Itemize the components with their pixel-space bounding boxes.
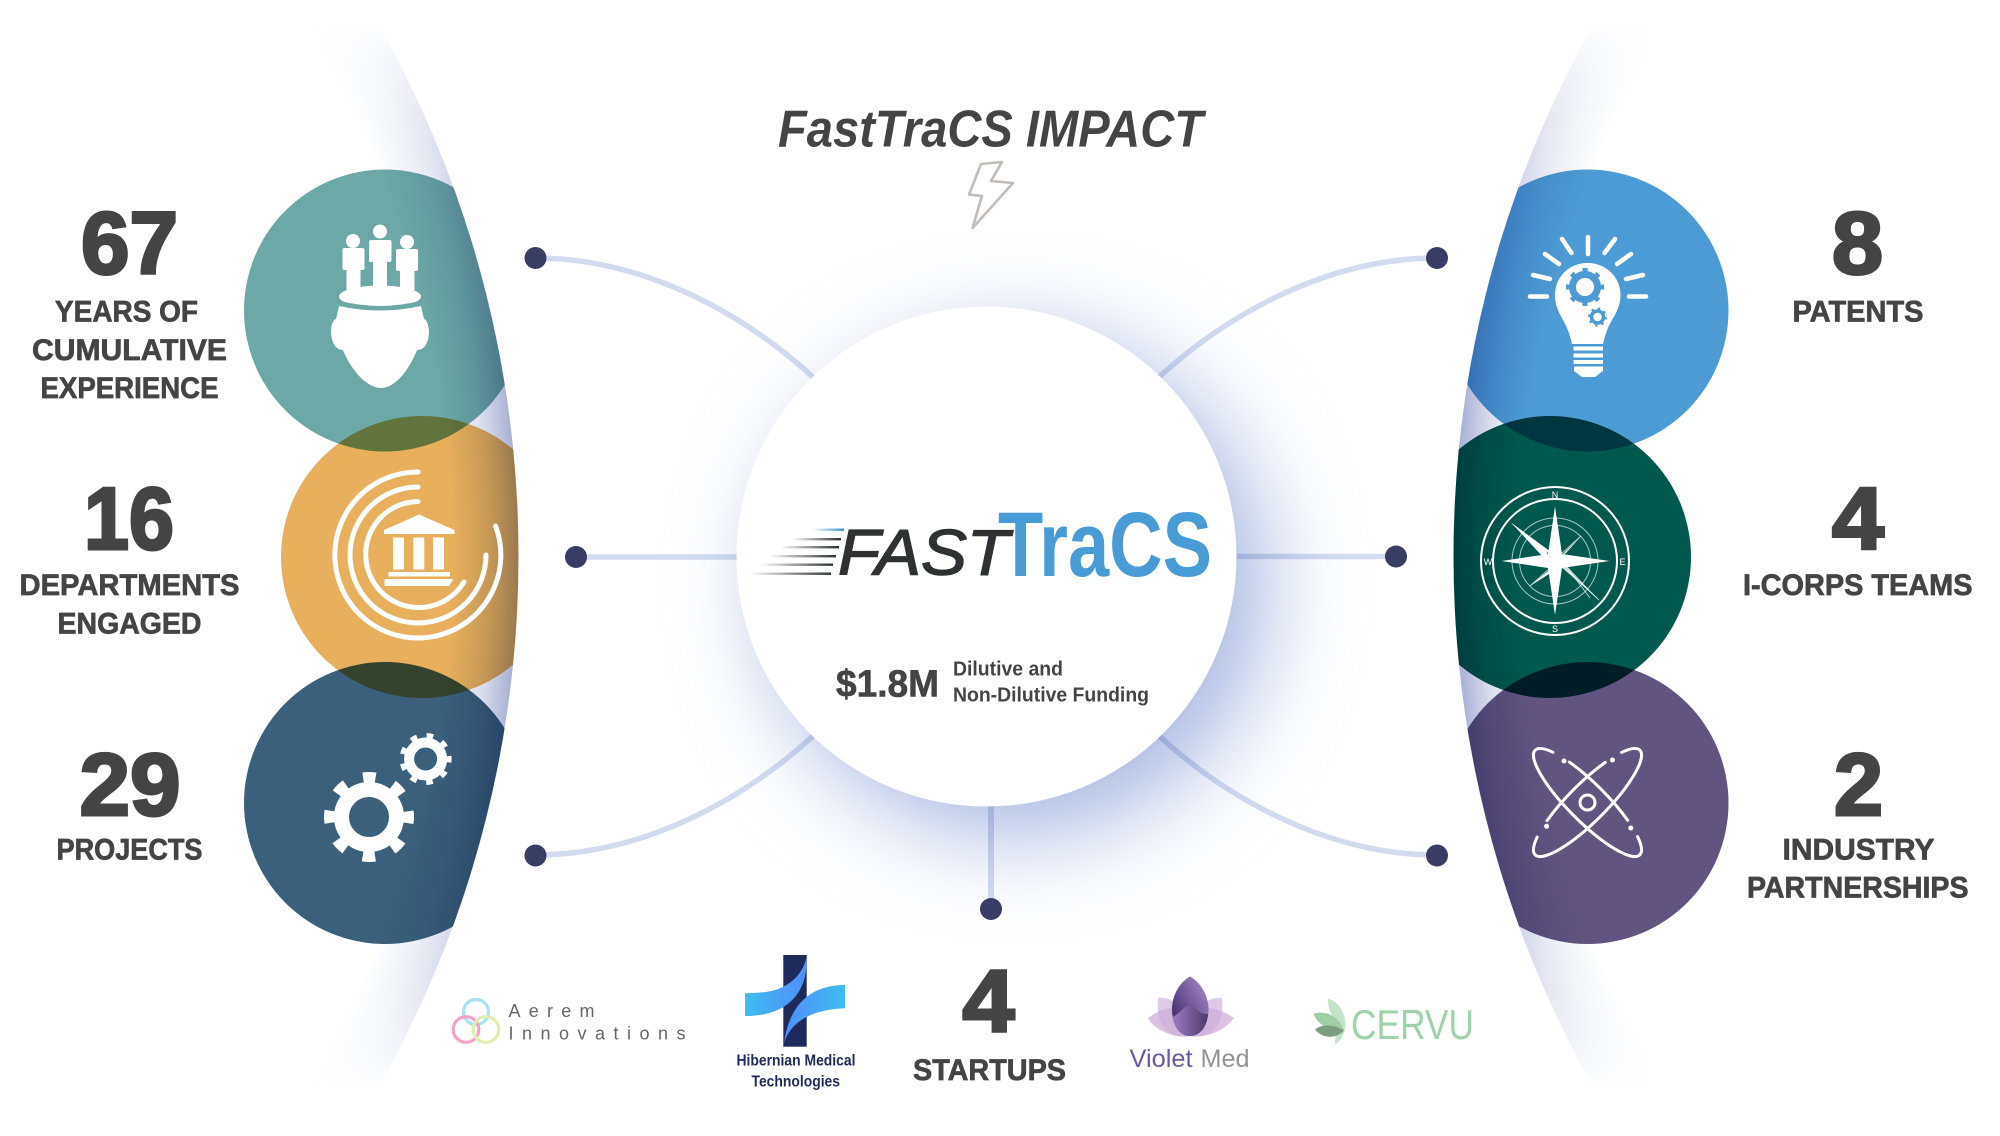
funding stat: Dilutive and [953, 658, 1063, 680]
stat: 16 departments engaged: DEPARTMENTS [20, 569, 240, 602]
stat: 8 patents: PATENTS [1792, 296, 1924, 328]
stat: 67 years of cumulative experience [32, 194, 227, 405]
stat: 8 patents [1792, 194, 1924, 328]
stat: 4 startups: 4 [962, 952, 1015, 1050]
icon: atom [1522, 737, 1653, 868]
logo: FastTraCS: TraCS [998, 494, 1212, 596]
funding stat: Non-Dilutive Funding [953, 684, 1149, 706]
stat: 2 industry partnerships: PARTNERSHIPS [1747, 872, 1968, 904]
icon: compass: N [1552, 490, 1558, 500]
logo: Aerem Innovations: Aerem [508, 1001, 594, 1021]
funding stat [836, 658, 1149, 706]
stat: 67 years of cumulative experience: CUMULATIVE [32, 334, 227, 367]
icon: gears [331, 736, 449, 855]
stat: 4 I-Corps teams [1743, 469, 1972, 602]
stat: 16 departments engaged: ENGAGED [58, 608, 202, 640]
stat: 2 industry partnerships [1747, 735, 1968, 904]
icon: head with people [331, 224, 429, 388]
icon: light bulb with gears [1530, 237, 1646, 377]
center circle [736, 306, 1236, 806]
funding stat: $1.8M [836, 664, 939, 706]
logo: Violet Med [1130, 976, 1250, 1073]
stat: 4 I-Corps teams: 4 [1832, 469, 1884, 568]
logo: Hibernian Medical Technologies [736, 955, 856, 1091]
stat: 29 projects: PROJECTS [56, 834, 202, 866]
stat: 16 departments engaged [20, 469, 240, 640]
icon: compass: W [1484, 557, 1493, 567]
logo: Hibernian Medical Technologies: Technologies [752, 1074, 840, 1091]
stat: 4 startups: STARTUPS [913, 1054, 1066, 1087]
logo: CERVU: CERVU [1351, 1001, 1474, 1048]
stat: 67 years of cumulative experience: EXPERIENCE [40, 372, 218, 405]
logo: Violet Med: Violet [1130, 1045, 1193, 1073]
logo: FastTraCS: FAST [838, 516, 1013, 588]
logo: Hibernian Medical Technologies: Hibernian Medical [736, 1053, 856, 1070]
logo: Aerem Innovations [453, 1000, 686, 1044]
stat: 4 startups [913, 952, 1066, 1087]
stat: 29 projects: 29 [80, 735, 180, 834]
icon: compass [1481, 487, 1629, 635]
stat: 29 projects [56, 735, 202, 866]
icon: compass: S [1552, 624, 1558, 634]
stat: 2 industry partnerships: 2 [1834, 735, 1883, 834]
stat: 8 patents: 8 [1832, 194, 1883, 292]
stat: 16 departments engaged: 16 [84, 469, 174, 568]
central glow [766, 336, 1266, 836]
icon: compass: E [1619, 557, 1626, 567]
logo: CERVU [1314, 998, 1474, 1048]
logo: Violet Med: Med [1200, 1045, 1250, 1073]
logo: FastTraCS [750, 494, 1212, 596]
panel: left crescent with circles [244, 51, 518, 1062]
stat: 4 I-Corps teams: I-CORPS TEAMS [1743, 569, 1972, 602]
connector dots [524, 247, 1448, 920]
stat: 67 years of cumulative experience: 67 [81, 194, 178, 292]
logo: Aerem Innovations: Innovations [508, 1024, 686, 1044]
title: FastTraCS IMPACT [778, 100, 1207, 158]
panel: right crescent with circles [1454, 51, 1728, 1062]
stat: 2 industry partnerships: INDUSTRY [1782, 834, 1934, 866]
stat: 67 years of cumulative experience: YEARS OF [55, 296, 198, 328]
icon: lightning bolt [969, 162, 1013, 228]
icon: institution with arcs [335, 472, 501, 638]
connector lines [535, 258, 1437, 909]
